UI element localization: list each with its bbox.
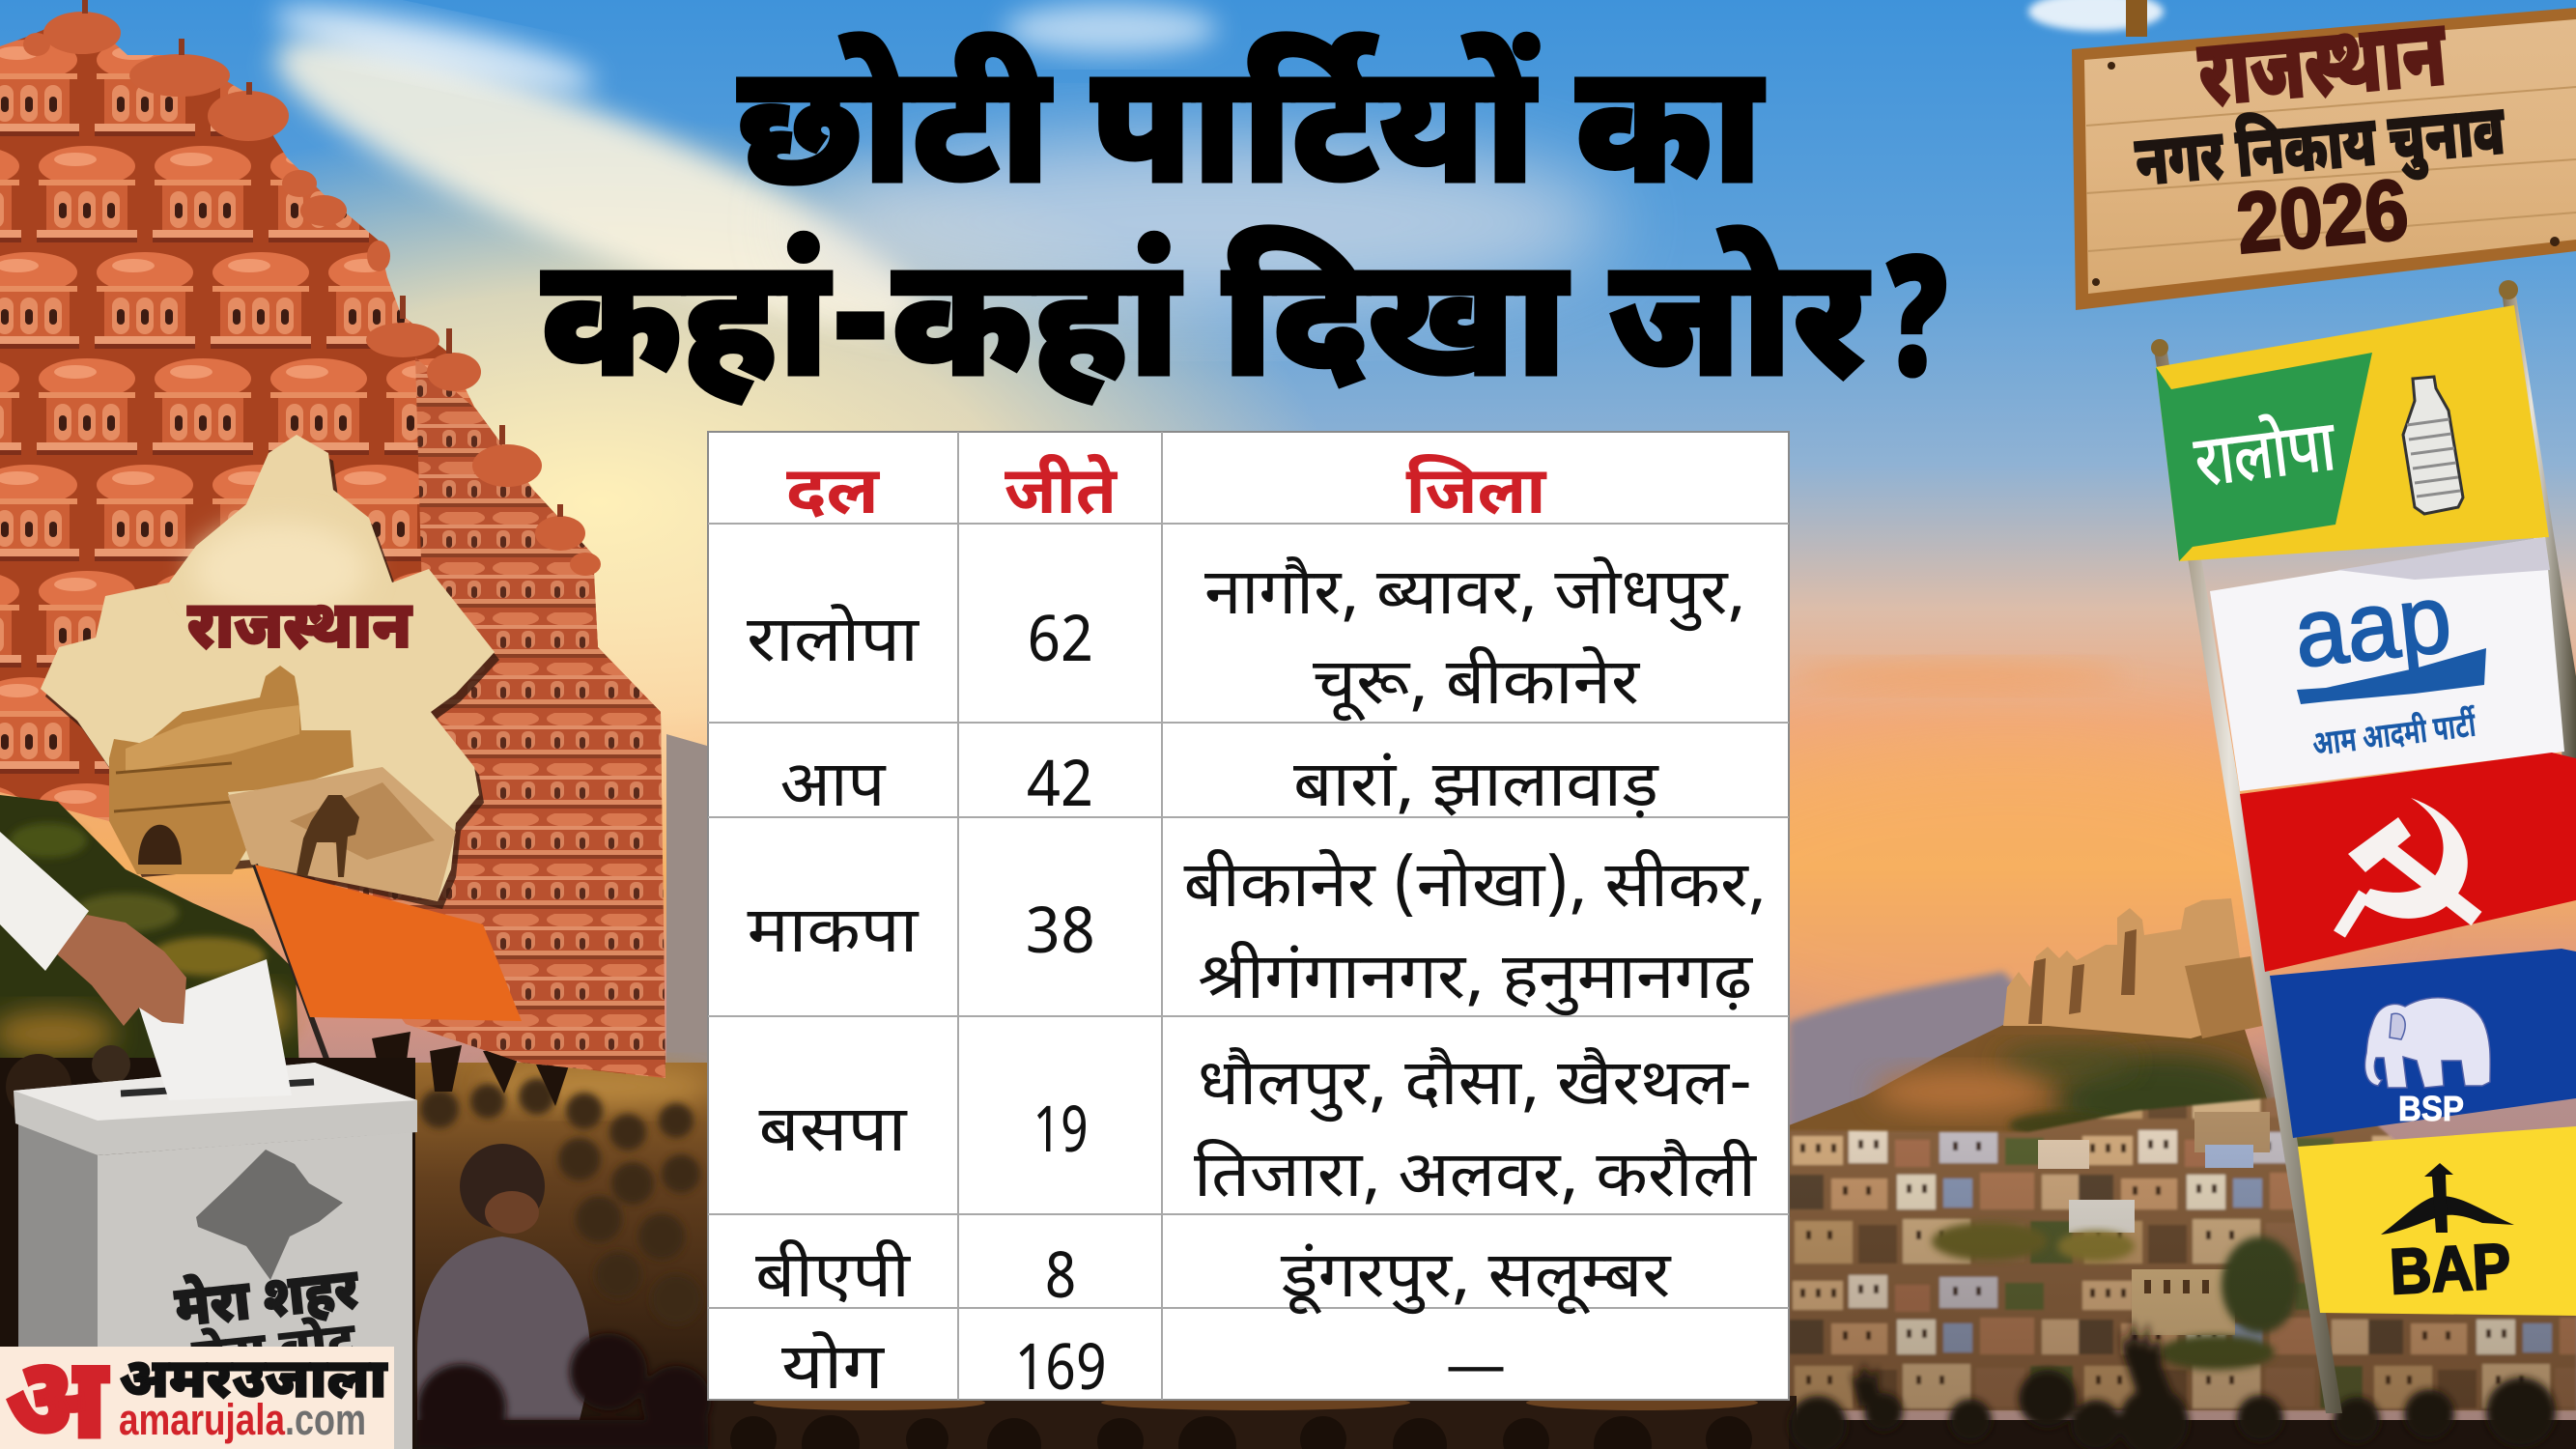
- results table: [708, 432, 1789, 1415]
- box front face: [98, 1132, 412, 1449]
- icon: elephant: [2364, 998, 2490, 1088]
- RLP label: रालोपा: [2191, 407, 2342, 515]
- foreground crowd left: [0, 1043, 415, 1449]
- camel: [297, 795, 359, 877]
- Rajasthan map cut-out: [41, 435, 499, 909]
- row: total: 169: [1014, 1332, 1107, 1415]
- flag: RLP: [2156, 305, 2549, 561]
- box slogan: मेरा शहर: [172, 1257, 363, 1350]
- row: AAP: 42: [1028, 749, 1093, 832]
- row: CPM: माकपा: [748, 895, 920, 978]
- Amar Ujala logo: [0, 1336, 394, 1449]
- row: total: —: [1449, 1327, 1503, 1399]
- row: BAP: बीएपी: [755, 1239, 912, 1322]
- title: छोटी पार्टियों का: [738, 32, 1766, 250]
- row: CPM: श्रीगंगानगर, हनुमानगढ़: [1198, 941, 1754, 1024]
- row: AAP: आप: [780, 749, 887, 832]
- row: total: योग: [781, 1331, 886, 1414]
- row: BAP: 8: [1045, 1240, 1076, 1323]
- row: RLP: 62: [1028, 604, 1093, 687]
- row: CPM: 38: [1026, 895, 1095, 979]
- row: BSP: बसपा: [759, 1094, 909, 1177]
- ballot box: मेरा वोट: [189, 1312, 360, 1393]
- wooden signboard: [2072, 0, 2576, 310]
- ballot box: [14, 1063, 417, 1449]
- AAP caption: आम आदमी पार्टी: [2310, 704, 2480, 770]
- voter hand and sleeve: [0, 832, 186, 1026]
- flag: BAP: [2298, 1126, 2576, 1316]
- fort inside map: [109, 666, 354, 874]
- trees: [0, 795, 299, 1072]
- wooden signboard: 2026: [2233, 161, 2412, 271]
- row: AAP: [780, 749, 1659, 832]
- flag: BSP: [2270, 949, 2576, 1138]
- ballot paper: [139, 959, 292, 1100]
- left crowd behind table: [372, 1032, 715, 1449]
- table header: [786, 454, 1548, 540]
- table background and grid: [708, 432, 1789, 1400]
- Hawa Mahal facade: [0, 0, 676, 1092]
- row: CPM: [748, 849, 1766, 1024]
- row: RLP: नागौर, ब्यावर, जोधपुर,: [1204, 556, 1745, 639]
- table header: जिला: [1406, 454, 1548, 540]
- foreground heads: [415, 1333, 711, 1449]
- box lid: [14, 1063, 417, 1155]
- hill under the fort: [1789, 1014, 2299, 1217]
- AAP wordmark: aap: [2289, 564, 2456, 688]
- title: [541, 32, 1953, 443]
- Amar Ujala logo: अमरउजाला: [120, 1349, 388, 1419]
- row: BSP: [759, 1047, 1758, 1222]
- city buildings: [1789, 1092, 2576, 1410]
- flag: CPM: [2240, 753, 2576, 972]
- row: total: [781, 1327, 1503, 1415]
- icon: broom: [2297, 648, 2486, 704]
- row: RLP: [747, 556, 1745, 729]
- row: BAP: [755, 1239, 1672, 1323]
- row: BSP: 19: [1033, 1094, 1088, 1178]
- fort on hilltop: [2003, 898, 2262, 1038]
- row: BSP: धौलपुर, दौसा, खैरथल-: [1198, 1047, 1752, 1130]
- box left face: [18, 1123, 98, 1449]
- BAP label: BAP: [2388, 1230, 2512, 1307]
- map label: राजस्थान: [187, 588, 412, 674]
- icon: bow and arrow: [2381, 1163, 2514, 1235]
- row: BAP: डूंगरपुर, सलूम्बर: [1280, 1239, 1672, 1322]
- BSP label: BSP: [2398, 1089, 2464, 1128]
- row: CPM: बीकानेर (नोखा), सीकर,: [1184, 849, 1766, 932]
- row: RLP: रालोपा: [747, 604, 920, 687]
- icon: bottle: [2403, 377, 2463, 514]
- bottom crowd strip under table: [705, 1395, 1797, 1449]
- title: ?: [1880, 227, 1953, 443]
- title: कहां-कहां दिखा जोर: [541, 226, 1871, 443]
- row: AAP: बारां, झालावाड़: [1293, 749, 1659, 832]
- hooded man: [417, 1236, 591, 1420]
- Amar Ujala logo: .com: [285, 1395, 366, 1444]
- dunes: [228, 767, 456, 901]
- row: BSP: तिजारा, अलवर, करौली: [1194, 1139, 1758, 1222]
- orange flag: [255, 865, 522, 1077]
- right crowd silhouette: [1789, 1319, 2576, 1449]
- table header: दल: [786, 454, 881, 540]
- flag: AAP: [2210, 537, 2564, 791]
- row: RLP: चूरू, बीकानेर: [1313, 646, 1640, 729]
- flag poles: [2151, 280, 2576, 1413]
- Amar Ujala logo: amarujala: [119, 1395, 286, 1444]
- distant mountains on the right: [1789, 972, 2067, 1140]
- grey map on box: [196, 1150, 343, 1280]
- table header: जीते: [1005, 454, 1118, 540]
- icon: hammer and sickle: [2339, 798, 2477, 934]
